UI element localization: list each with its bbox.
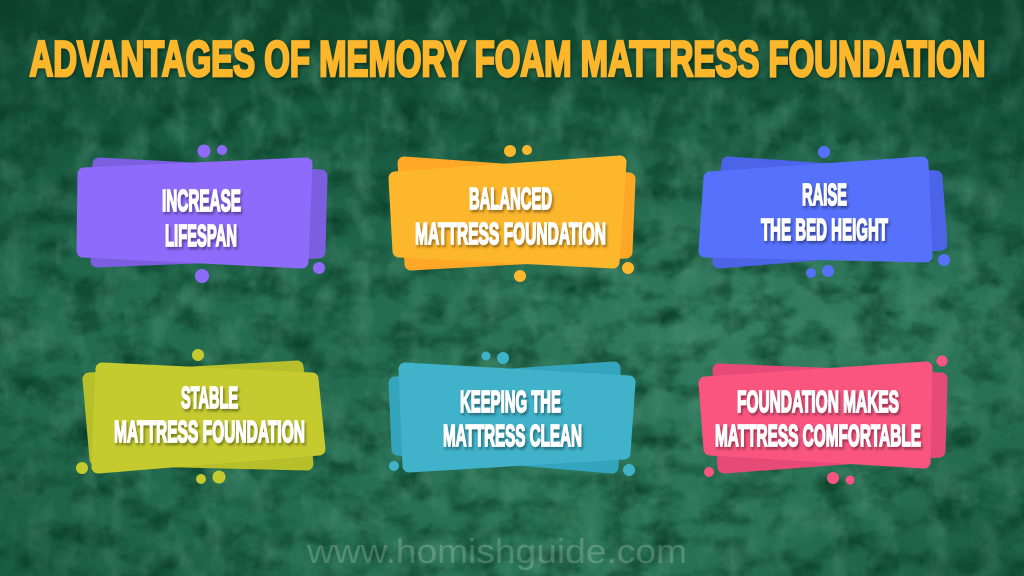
- panel: stable mattress foundation: [76, 349, 319, 484]
- panel: foundation makes mattress comfortable: [704, 356, 948, 484]
- panel: keeping the mattress clean: MATTRESS CLEAN: [443, 418, 582, 453]
- panel: stable mattress foundation: MATTRESS FOUNDATION: [114, 414, 305, 449]
- panel: balanced mattress foundation: [395, 145, 634, 282]
- website footer: www.homishguide.com: [306, 533, 687, 571]
- panel: stable mattress foundation: STABLE: [181, 380, 238, 415]
- panel: keeping the mattress clean: KEEPING THE: [460, 384, 561, 419]
- panel: raise the bed height: RAISE: [802, 177, 847, 212]
- panel: balanced mattress foundation: MATTRESS FOUNDATION: [415, 216, 606, 251]
- panel: raise the bed height: [705, 146, 950, 278]
- panel: balanced mattress foundation: BALANCED: [469, 181, 552, 216]
- panel: keeping the mattress clean: [389, 352, 635, 476]
- panel: increase lifespan: INCREASE: [162, 183, 241, 218]
- panel: raise the bed height: THE BED HEIGHT: [761, 212, 888, 247]
- panel: increase lifespan: LIFESPAN: [165, 218, 237, 253]
- panel: increase lifespan: [83, 144, 325, 283]
